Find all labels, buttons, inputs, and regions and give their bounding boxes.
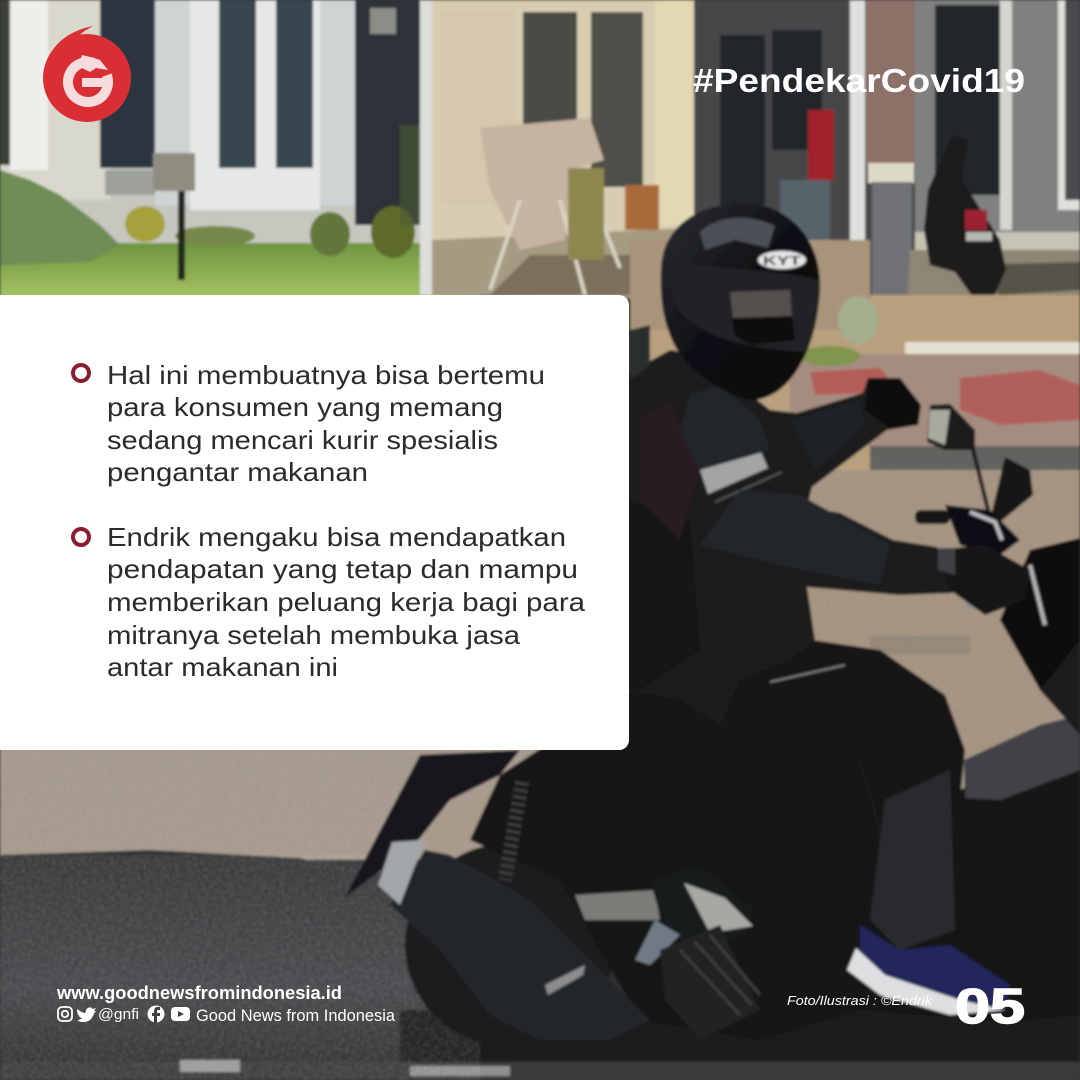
photo: road surface	[0, 470, 1080, 1080]
photo: full-face helmet: KYT	[763, 253, 801, 268]
logo: red speech-drop badge	[43, 26, 131, 122]
photo: dark room and pillar right	[694, 0, 1080, 350]
photo: rear wheel	[405, 843, 615, 1047]
website url: www.goodnewsfromindonesia.id	[56, 983, 342, 1003]
bullet text 1: pengantar makanan	[107, 457, 368, 487]
photo: exhaust muffler	[378, 840, 650, 1040]
bullet marker 2	[73, 529, 89, 545]
photo: scooter body	[470, 690, 1080, 1040]
photo credit: Foto/Ilustrasi : ©Endrik	[787, 993, 934, 1008]
bullet text 2: mitranya setelah membuka jasa	[107, 620, 521, 650]
hashtag title: #PendekarCovid19	[693, 62, 1025, 99]
photo: engine parts	[575, 865, 760, 1040]
photo: navy shoe	[847, 925, 1010, 1015]
photo: porch and door centre	[432, 0, 700, 300]
bullet text 1: Hal ini membuatnya bisa bertemu	[107, 360, 545, 390]
footer: website and social handles	[56, 983, 396, 1025]
panel: white text card	[0, 295, 629, 750]
photo: scooter rear fender	[345, 750, 520, 897]
bullet text 2: pendapatan yang tetap dan mampu	[107, 554, 578, 584]
photo: rider trousers	[640, 635, 965, 955]
photo: lawn and shrubs	[0, 0, 508, 300]
photo: handlebar and mirror	[915, 404, 1045, 625]
bullet item 2	[73, 522, 586, 682]
bullet marker 1	[73, 365, 89, 381]
bullet text 1: sedang mencari kurir spesialis	[107, 425, 498, 455]
photo: full-face helmet	[661, 203, 820, 400]
photo: parked motorcycle	[924, 135, 1006, 305]
logo: white emblem ring	[62, 55, 114, 108]
page number: 05	[955, 980, 1025, 1034]
bullet text 2: Endrik mengaku bisa mendapatkan	[107, 522, 566, 552]
bullet text 1	[107, 360, 545, 487]
photo: house facade left	[0, 0, 440, 300]
social handle: @gnfi	[98, 1006, 139, 1023]
photo: driveway, brick strip and plants	[630, 240, 1080, 475]
bullet text 2: antar makanan ini	[107, 652, 338, 682]
icon: twitter	[77, 1007, 96, 1022]
bullet text 1: para konsumen yang memang	[107, 392, 503, 422]
bullet text 2	[107, 522, 586, 682]
icon: facebook	[148, 1006, 164, 1023]
icon: instagram	[58, 1007, 72, 1021]
brand name: Good News from Indonesia	[196, 1006, 396, 1025]
bullet item 1	[73, 360, 545, 487]
photo: rider jacket	[625, 325, 1030, 725]
icon: youtube	[171, 1007, 190, 1021]
photo: rear suspension spring	[505, 782, 522, 880]
bullet text 2: memberikan peluang kerja bagi para	[107, 587, 586, 617]
